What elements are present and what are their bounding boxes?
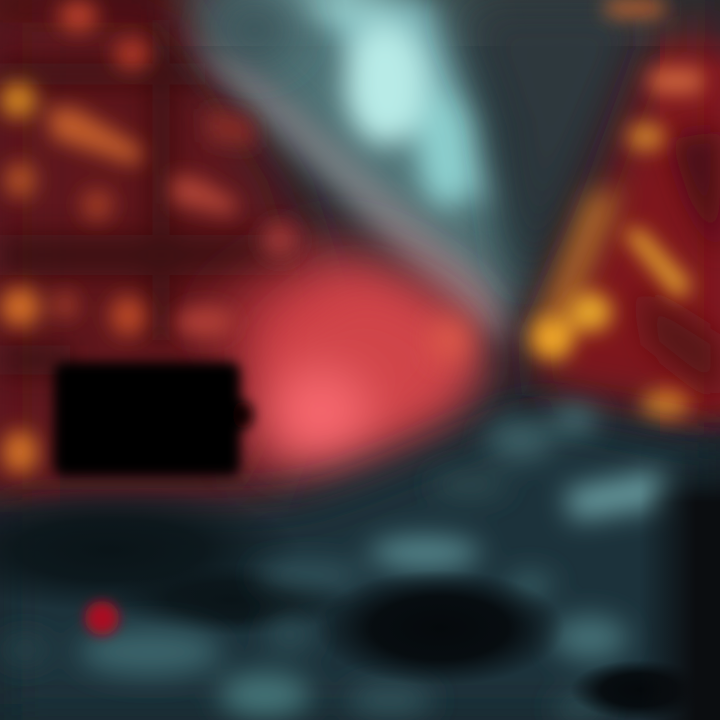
panel: orange window lights, left bbox=[0, 0, 298, 474]
panel: teal sky, top centre bbox=[180, 0, 530, 320]
panel: pale cyan light, top centre bbox=[302, 0, 495, 210]
shadow patches, left ground bbox=[0, 488, 350, 636]
panel: red and orange structure, right bbox=[530, 0, 720, 425]
panel: grey light band, diagonal bbox=[190, 45, 512, 345]
panel: black rectangle bbox=[54, 362, 253, 476]
panel: red building area, left bbox=[0, 0, 335, 512]
panel: edge colour underlay bbox=[0, 0, 720, 515]
panel: dark grey tower, top right bbox=[217, 0, 650, 290]
shadow patches, dark centre and right rail bbox=[325, 463, 720, 720]
icon: red dot bbox=[85, 601, 119, 635]
panel: pink glow, centre bbox=[210, 245, 481, 470]
panel: dark teal ground, bottom bbox=[0, 406, 720, 720]
